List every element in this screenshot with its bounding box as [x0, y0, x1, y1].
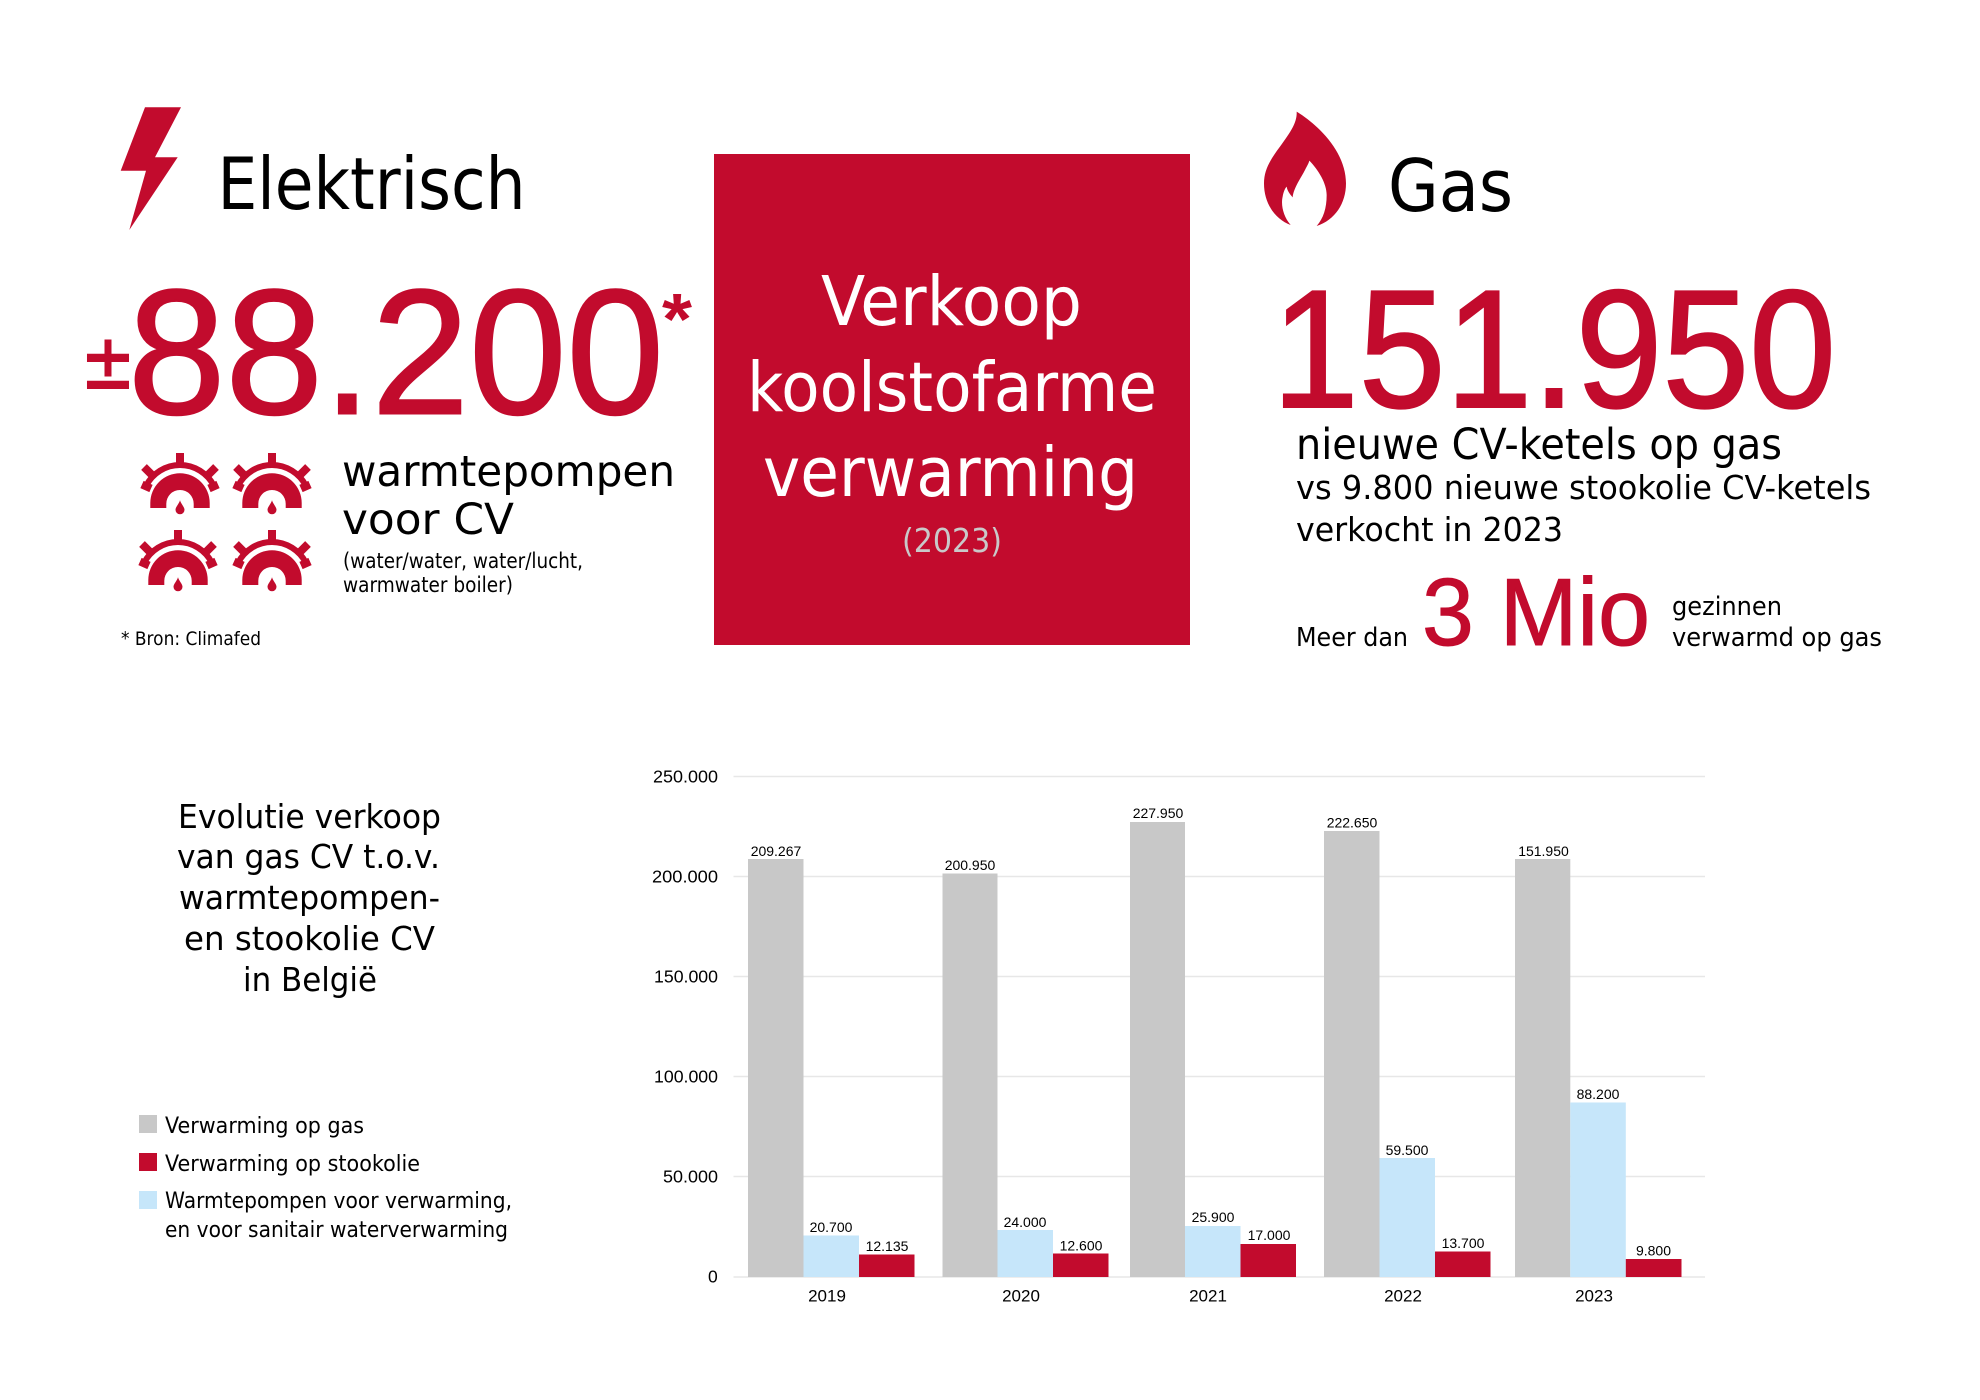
- bars: 2020: [942, 857, 1108, 1277]
- x axis labels: 2022: [1384, 1286, 1422, 1306]
- bars: 2022: 13.700: [1442, 1235, 1485, 1251]
- bars: 2023: 151.950: [1518, 843, 1569, 859]
- big number: 88.200: 88.200: [128, 252, 664, 452]
- title: verwarming: [763, 433, 1138, 513]
- x axis labels: 2020: [1002, 1286, 1040, 1306]
- text: heat pump types: (water/water, water/lucht,: [343, 549, 583, 573]
- y axis labels: 250.000: [653, 766, 718, 786]
- box background: [714, 154, 1190, 645]
- bars: 2019: 12.135: [866, 1238, 909, 1254]
- panel: gas: [1264, 112, 1882, 666]
- bars: 2019: [748, 843, 914, 1277]
- bars: 2020: 200.950: [945, 857, 996, 873]
- legend item: stookolie: Verwarming op stookolie: [165, 1152, 420, 1177]
- x axis labels: 2019: [808, 1286, 846, 1306]
- title: [747, 262, 1157, 513]
- icon: flame: [1264, 112, 1346, 226]
- chart title: en stookolie CV: [184, 919, 435, 958]
- text: heat pump types: warmwater boiler): [343, 573, 513, 597]
- chart title: [177, 797, 441, 999]
- text: households on gas: gezinnen: [1672, 592, 1782, 622]
- text: warmtepompen voor CV: voor CV: [342, 495, 515, 545]
- panel: elektrisch: [81, 107, 692, 650]
- y axis labels: 100.000: [654, 1066, 718, 1086]
- bars: 2021: 227.950: [1133, 805, 1184, 821]
- chart title: Evolutie verkoop: [178, 797, 441, 836]
- panel: title box: [714, 154, 1190, 645]
- bars: 2022: 59.500: [1386, 1142, 1429, 1158]
- y axis labels: [652, 766, 718, 1286]
- bars: 2022: [1324, 814, 1490, 1277]
- text: warmtepompen voor CV: [342, 447, 675, 545]
- bars: 2020: 12.600: [1060, 1238, 1103, 1254]
- x axis labels: 2021: [1189, 1286, 1227, 1306]
- source note: * Bron: Climafed: [121, 628, 261, 650]
- plus-minus sign: ±: [81, 317, 135, 406]
- title: Verkoop: [821, 262, 1082, 342]
- text: oil boilers comparison: vs 9.800 nieuwe stookolie CV-ketels: [1296, 468, 1871, 507]
- bars: 2023: [1515, 843, 1682, 1277]
- x axis labels: 2023: [1575, 1286, 1613, 1306]
- bar chart: [652, 766, 1705, 1306]
- text: households on gas: [1672, 592, 1882, 653]
- text: households on gas: verwarmd op gas: [1672, 623, 1882, 653]
- x axis labels: [808, 1286, 1613, 1306]
- text: heat pump types: [343, 549, 583, 597]
- chart title: in België: [243, 960, 377, 999]
- text: warmtepompen voor CV: warmtepompen: [342, 447, 675, 497]
- bars: 2021: [1130, 805, 1296, 1277]
- text: oil boilers comparison: [1296, 468, 1871, 549]
- big number: 3 Mio: 3 Mio: [1422, 559, 1650, 666]
- icon: lightning bolt: [121, 107, 181, 230]
- legend item: warmtepompen: en voor sanitair waterverwarming: [165, 1218, 508, 1243]
- year: (2023): [902, 521, 1002, 560]
- legend item: warmtepompen: [139, 1189, 512, 1243]
- bars: 2021: 25.900: [1192, 1209, 1235, 1225]
- footnote asterisk: *: [662, 280, 692, 360]
- y axis labels: 0: [708, 1266, 718, 1286]
- legend item: gas: Verwarming op gas: [165, 1114, 364, 1139]
- text: new gas boilers: nieuwe CV-ketels op gas: [1296, 420, 1782, 470]
- bars: 2020: 24.000: [1004, 1214, 1047, 1230]
- text: oil boilers comparison: verkocht in 2023: [1296, 510, 1563, 549]
- chart title: van gas CV t.o.v.: [177, 837, 440, 876]
- chart title: warmtepompen-: [179, 878, 440, 917]
- heading: Elektrisch: Elektrisch: [218, 142, 526, 226]
- icons: four heat pumps: [140, 453, 310, 591]
- y axis labels: 150.000: [654, 966, 718, 986]
- bars: 2022: 222.650: [1327, 814, 1378, 830]
- bars: 2023: 9.800: [1636, 1242, 1671, 1258]
- title: koolstofarme: [747, 348, 1157, 428]
- big number: 151.950: 151.950: [1272, 255, 1836, 443]
- y axis labels: 200.000: [652, 866, 718, 886]
- bars: 2021: 17.000: [1248, 1227, 1291, 1243]
- bars: 2023: 88.200: [1577, 1086, 1620, 1102]
- heading: Gas: Gas: [1388, 144, 1513, 228]
- y axis labels: 50.000: [663, 1166, 718, 1186]
- text: meer dan: Meer dan: [1296, 623, 1408, 653]
- bars: 2019: 20.700: [810, 1219, 853, 1235]
- legend item: warmtepompen: Warmtepompen voor verwarming,: [165, 1189, 512, 1214]
- legend: [139, 1114, 512, 1243]
- bars: 2019: 209.267: [751, 843, 802, 859]
